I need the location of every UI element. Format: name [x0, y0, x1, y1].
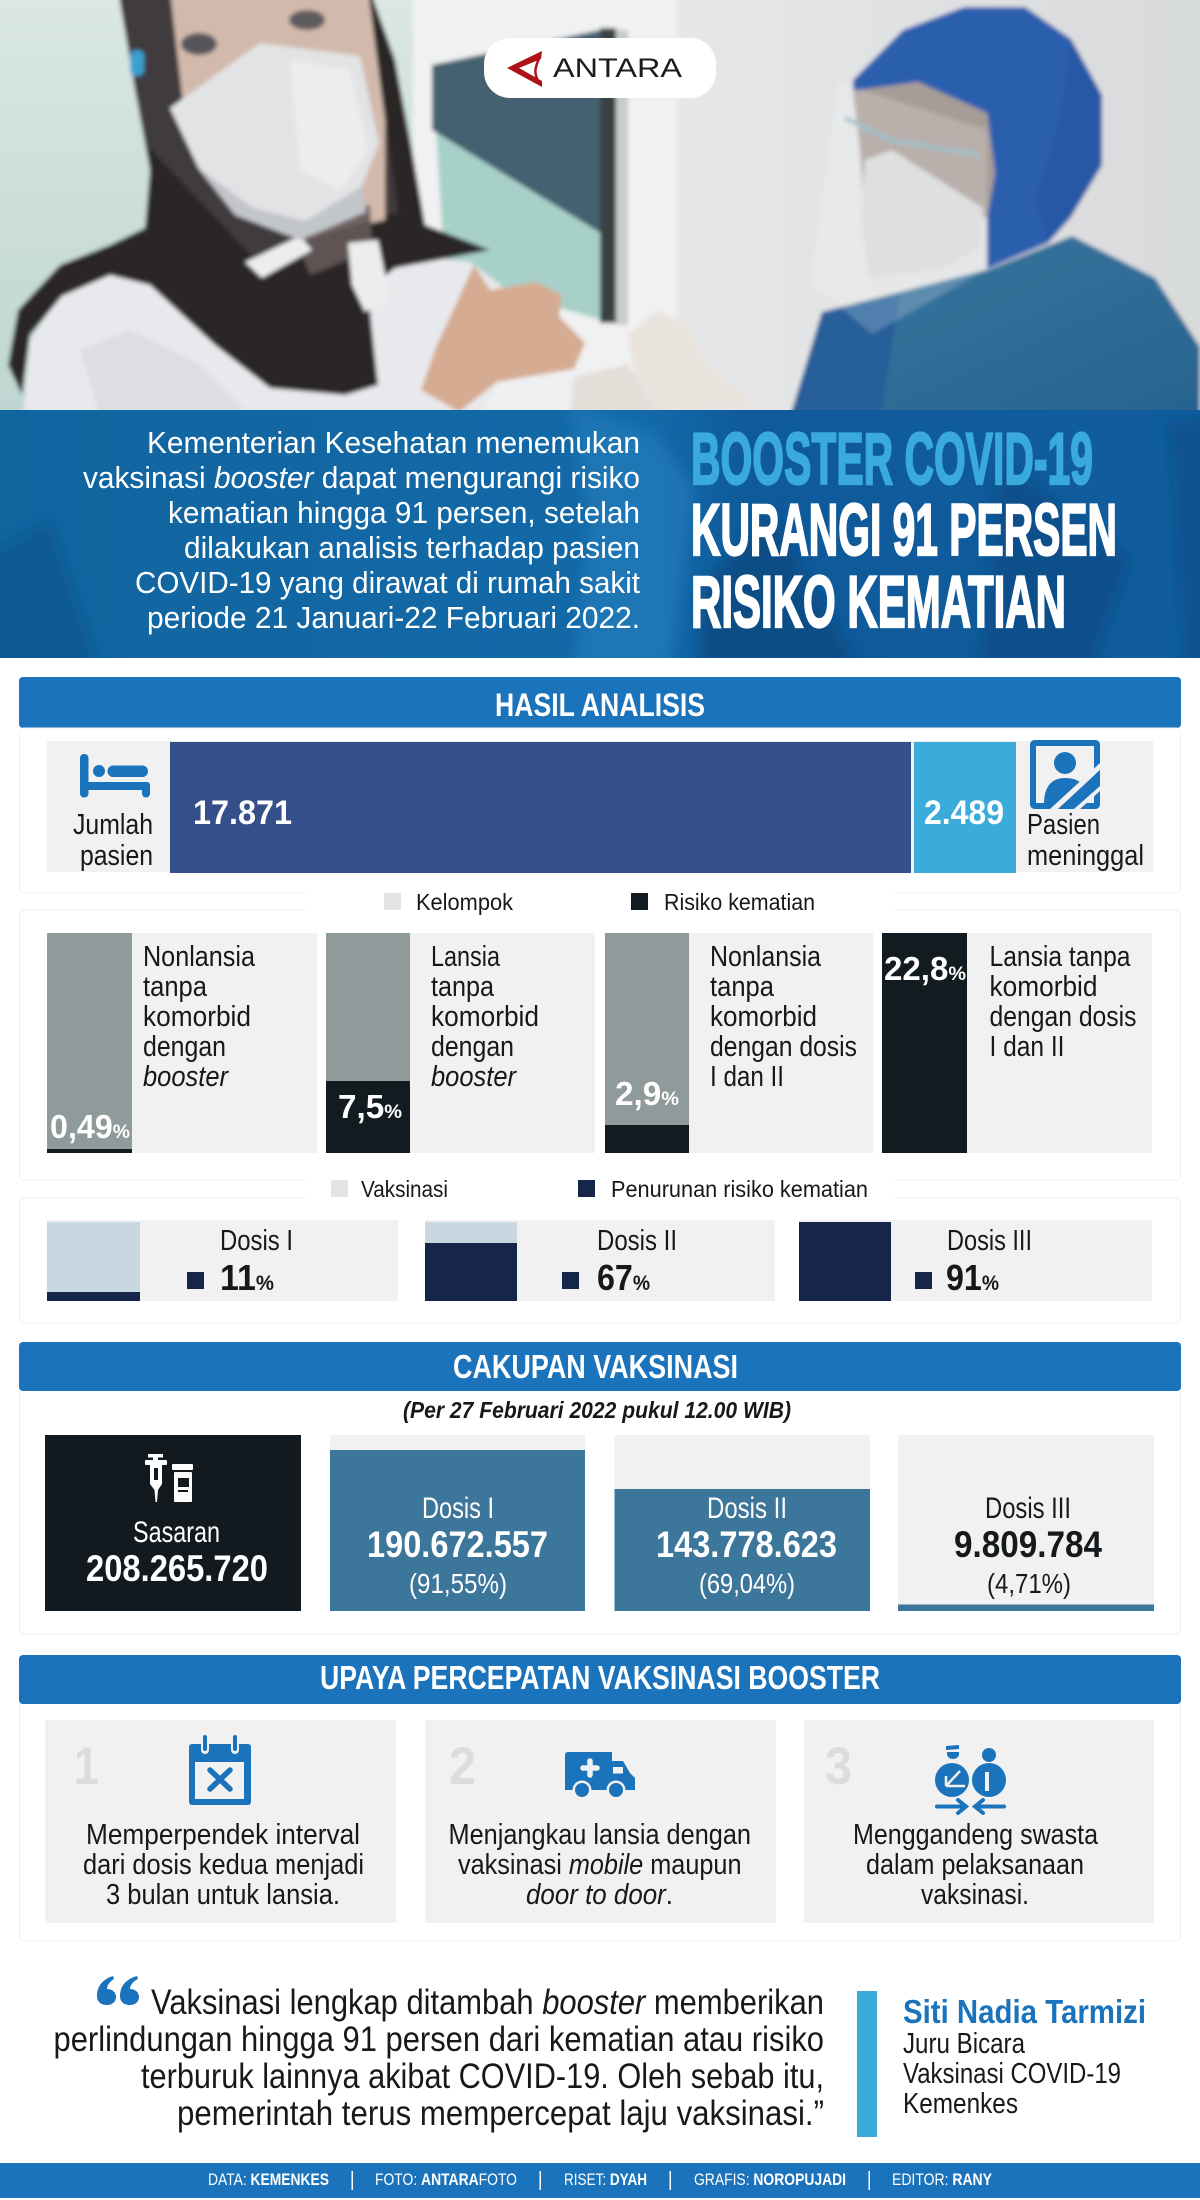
card: step 1: Memperpendek interval [86, 1819, 360, 1851]
bar: total patients [170, 742, 911, 873]
main title [691, 419, 1117, 643]
card: step 1: dari dosis kedua menjadi [83, 1849, 364, 1881]
icon: bed [80, 754, 150, 798]
card: Lansia booster 7,5%: komorbid [431, 1001, 539, 1033]
card: step 3: dalam pelaksanaan [866, 1849, 1084, 1881]
label: Jumlah pasien: pasien [80, 840, 153, 872]
bar: patients died [914, 742, 1016, 873]
quote attribution: Juru Bicara [903, 2028, 1026, 2060]
card: Dosis III 91% [799, 1220, 1152, 1301]
card: Dosis III coverage: 9.809.784 [954, 1524, 1102, 1565]
card: Dosis III 91%: Dosis III [947, 1225, 1032, 1257]
quote attribution: Siti Nadia Tarmizi [903, 1993, 1146, 2030]
quote attribution: Vaksinasi COVID-19 [903, 2058, 1121, 2090]
card: Dosis III 91%: 91% [946, 1257, 999, 1298]
card: Dosis I coverage: 190.672.557 [367, 1524, 548, 1565]
card: Lansia booster 7,5%: 7,5% [338, 1088, 402, 1125]
card: step 3: 3 [825, 1737, 852, 1796]
card: Nonlansia booster 0,49%: booster [143, 1061, 229, 1093]
quote text: Vaksinasi lengkap ditambah booster memberikan [151, 1983, 824, 2022]
quote attribution [903, 1993, 1146, 2120]
card: Dosis I coverage: (91,55%) [409, 1568, 507, 1599]
card: Nonlansia booster 0,49%: tanpa [143, 971, 208, 1003]
card: Lansia booster 7,5%: Lansia [431, 941, 501, 973]
card: Dosis II 67%: Dosis II [597, 1225, 677, 1257]
card: Lansia dosis I dan II 22,8% [882, 933, 1152, 1153]
card: Dosis II coverage: (69,04%) [699, 1568, 795, 1599]
card: Sasaran [45, 1435, 301, 1611]
card: Dosis I coverage [330, 1435, 585, 1611]
hero intro paragraph: COVID-19 yang dirawat di rumah sakit [135, 565, 640, 600]
card: Lansia dosis I dan II 22,8%: I dan II [990, 1031, 1064, 1063]
card: step 1: 1 [74, 1737, 99, 1796]
legend: group and death risk: Kelompok [416, 889, 513, 915]
quote text: terburuk lainnya akibat COVID-19. Oleh sebab itu, [141, 2057, 824, 2096]
hero intro paragraph: periode 21 Januari-22 Februari 2022. [147, 600, 640, 635]
legend: group and death risk [306, 889, 893, 915]
card: Lansia booster 7,5%: tanpa [431, 971, 495, 1003]
label: Pasien meninggal: meninggal [1027, 840, 1144, 872]
legend: vaccination and risk reduction [306, 1176, 893, 1202]
card: Dosis II coverage: 143.778.623 [656, 1524, 837, 1565]
card: Nonlansia dosis I dan II 2,9%: I dan II [710, 1061, 784, 1093]
hero intro paragraph: kematian hingga 91 persen, setelah [168, 495, 640, 530]
card: Dosis I 11%: 11% [220, 1257, 274, 1298]
card: step 2: 2 [449, 1737, 476, 1796]
panel: risk reduction by dose [20, 1198, 1180, 1323]
footer credits: EDITOR: RANY [892, 2170, 993, 2189]
footer credits [0, 2163, 1200, 2198]
label: Pasien meninggal [1027, 809, 1144, 872]
panel: death risk by group [20, 910, 1180, 1180]
card: Nonlansia dosis I dan II 2,9%: 2,9% [615, 1075, 679, 1112]
label: Pasien meninggal: Pasien [1027, 809, 1100, 841]
card: Nonlansia booster 0,49%: komorbid [143, 1001, 251, 1033]
card: Lansia dosis I dan II 22,8%: dengan dosis [990, 1001, 1136, 1033]
card: Dosis III coverage: (4,71%) [987, 1568, 1071, 1599]
card: Nonlansia booster 0,49%: 0,49% [50, 1108, 130, 1145]
card: Nonlansia dosis I dan II 2,9% [605, 933, 873, 1153]
card: Nonlansia dosis I dan II 2,9%: dengan dosis [710, 1031, 857, 1063]
card: Nonlansia dosis I dan II 2,9%: Nonlansia [710, 941, 822, 973]
label: Jumlah pasien [73, 809, 153, 872]
card: Dosis III coverage [898, 1435, 1154, 1611]
subtitle: date: (Per 27 Februari 2022 pukul 12.00 WIB) [403, 1397, 791, 1423]
hero intro paragraph: Kementerian Kesehatan menemukan [147, 425, 640, 460]
card: Dosis III coverage: Dosis III [985, 1492, 1071, 1525]
card: Lansia dosis I dan II 22,8%: Lansia tanpa [990, 941, 1131, 973]
card: Dosis II coverage: Dosis II [707, 1492, 787, 1525]
icon: two people with arrows [935, 1745, 1006, 1813]
hero intro paragraph: dilakukan analisis terhadap pasien [184, 530, 640, 565]
logo: ANTARA: ANTARA [553, 53, 682, 83]
panel: booster acceleration efforts [19, 1655, 1181, 1941]
heading: UPAYA PERCEPATAN VAKSINASI BOOSTER: UPAYA PERCEPATAN VAKSINASI BOOSTER [320, 1659, 880, 1696]
legend: vaccination and risk reduction: Vaksinasi [361, 1176, 448, 1202]
legend: vaccination and risk reduction: Penurunan risiko kematian [611, 1176, 868, 1202]
card: Nonlansia booster 0,49%: dengan [143, 1031, 226, 1063]
card: Lansia booster 7,5%: booster [431, 1061, 517, 1093]
icon: ANTARA chevron [507, 51, 542, 87]
card: step 3 [804, 1720, 1154, 1923]
quote accent bar [857, 1991, 877, 2137]
panel: vaccination coverage [19, 1342, 1181, 1634]
card: Dosis I 11% [47, 1220, 398, 1301]
hero blue band [0, 405, 1200, 670]
legend: group and death risk: Risiko kematian [664, 889, 815, 915]
card: Lansia dosis I dan II 22,8%: 22,8% [884, 950, 966, 987]
quote text: perlindungan hingga 91 persen dari kematian atau risiko [54, 2020, 824, 2059]
hero photo: doctor vaccinating a patient [0, 0, 1200, 410]
icon: syringe and vial [145, 1454, 193, 1502]
card: Lansia booster 7,5%: dengan [431, 1031, 514, 1063]
quote attribution: Kemenkes [903, 2088, 1018, 2120]
hero intro paragraph: vaksinasi booster dapat mengurangi risiko [83, 460, 640, 495]
quote text: pemerintah terus mempercepat laju vaksinasi.” [177, 2094, 824, 2133]
card: Dosis I coverage: Dosis I [422, 1492, 494, 1525]
icon: ambulance [565, 1752, 635, 1800]
card: Nonlansia booster 0,49% [47, 933, 317, 1153]
card: step 2: door to door. [526, 1879, 673, 1911]
quote text [54, 1983, 824, 2133]
bar: patients died: 2.489 [924, 794, 1004, 832]
icon: patient portrait with mourning ribbon [1033, 743, 1100, 809]
card: step 1 [45, 1720, 396, 1923]
heading: UPAYA PERCEPATAN VAKSINASI BOOSTER [19, 1655, 1181, 1704]
card: step 3: Menggandeng swasta [853, 1819, 1099, 1851]
footer credits: GRAFIS: NOROPUJADI [694, 2170, 846, 2189]
footer credits: RISET: DYAH [564, 2170, 647, 2189]
card: Sasaran: Sasaran [133, 1516, 220, 1549]
card: Dosis II 67% [425, 1220, 775, 1301]
bar: total patients: 17.871 [193, 794, 292, 832]
label: Jumlah pasien: Jumlah [73, 809, 153, 841]
heading: HASIL ANALISIS: HASIL ANALISIS [495, 687, 705, 723]
footer credits: FOTO: ANTARAFOTO [375, 2170, 517, 2189]
card: Dosis I 11%: Dosis I [220, 1225, 293, 1257]
panel: patient totals [20, 728, 1180, 893]
card: Nonlansia booster 0,49%: Nonlansia [143, 941, 256, 973]
card: step 2: Menjangkau lansia dengan [448, 1819, 751, 1851]
card: Lansia dosis I dan II 22,8%: komorbid [990, 971, 1098, 1003]
card: step 2 [425, 1720, 776, 1923]
heading: CAKUPAN VAKSINASI [19, 1342, 1181, 1391]
heading: HASIL ANALISIS [19, 677, 1181, 728]
card: Nonlansia dosis I dan II 2,9%: tanpa [710, 971, 775, 1003]
card: Sasaran: 208.265.720 [86, 1548, 268, 1589]
card: Nonlansia dosis I dan II 2,9%: komorbid [710, 1001, 817, 1033]
card: Lansia booster 7,5% [326, 933, 595, 1153]
icon: calendar with X [189, 1737, 251, 1805]
heading: CAKUPAN VAKSINASI: CAKUPAN VAKSINASI [453, 1348, 738, 1385]
card: step 3: vaksinasi. [921, 1879, 1029, 1911]
icon: quotation mark [97, 1976, 139, 2005]
footer credits: DATA: KEMENKES [208, 2170, 329, 2189]
card: step 2: vaksinasi mobile maupun [458, 1849, 742, 1881]
hero intro paragraph [83, 425, 640, 635]
logo: ANTARA [484, 38, 716, 98]
card: Dosis II 67%: 67% [597, 1257, 650, 1298]
card: step 1: 3 bulan untuk lansia. [106, 1879, 340, 1911]
card: Dosis II coverage [614, 1435, 870, 1611]
